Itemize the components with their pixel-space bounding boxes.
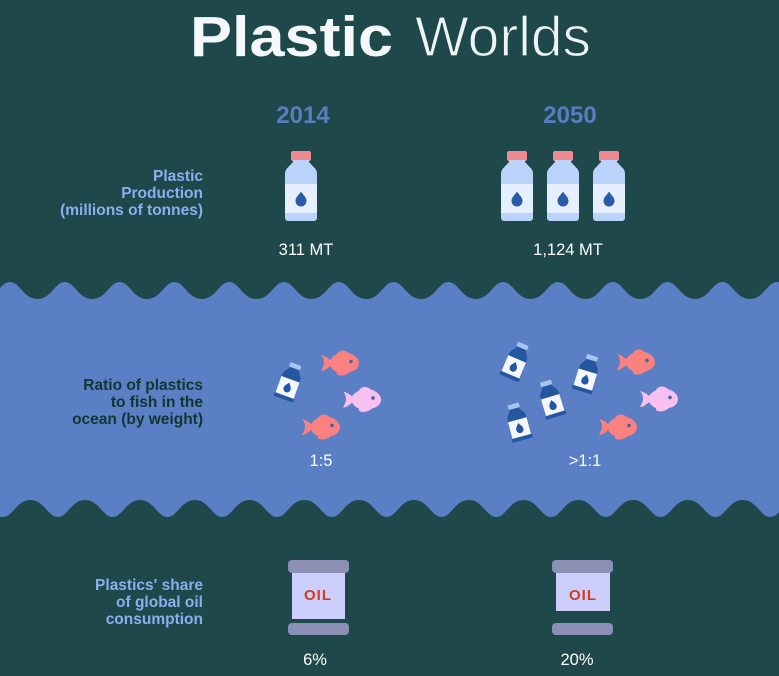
icon: oil barrel 2014: OIL [304,587,332,604]
row label: share of oil consumption: of global oil [116,594,203,611]
icon: small bottle 2 [572,353,603,395]
icons: bottles 2050 [501,151,625,221]
icon: pink fish [343,387,381,412]
icon: salmon fish top [617,350,655,374]
icon: salmon fish bottom [599,414,637,440]
value: 20%: 20% [560,651,594,669]
row label: share of oil consumption [95,577,203,628]
icon: oil barrel 2014 [288,560,349,635]
value: 1,124 MT: 1,124 MT [533,241,603,259]
value: 311 MT: 311 MT [279,241,333,259]
row label: share of oil consumption: consumption [106,611,203,628]
icon: bottle 2014 [285,151,317,221]
year heading 2050: 2050 [543,102,597,129]
row label: plastic production: (millions of tonnes) [60,202,203,219]
value: >1:1: >1:1 [569,452,601,470]
value: 1:5: 1:5 [310,452,332,470]
icon: oil barrel 2050 [552,560,613,635]
title: Plastic [190,5,393,69]
row label: ratio of plastics to fish: Ratio of plastics [83,377,203,394]
icon: oil barrel 2050: OIL [569,587,597,604]
icon: small bottle 4 [503,401,533,443]
icon: small bottle 1 [499,340,533,382]
icon: salmon fish bottom [302,414,340,440]
ocean band with wavy edges [0,282,779,517]
icon: pink fish [640,386,678,412]
row label: ratio of plastics to fish [72,377,203,428]
row label: ratio of plastics to fish: ocean (by weight) [72,411,203,428]
row label: ratio of plastics to fish: to fish in the [111,394,203,411]
icon group: 2050 plastic and fish [499,340,678,443]
row label: plastic production [60,168,203,219]
icon group: 2014 plastic and fish [273,350,381,440]
value: 6%: 6% [303,651,327,669]
row label: plastic production: Production [121,185,203,202]
icon: small bottle 3 [535,378,566,420]
icon: salmon fish top [321,350,359,376]
icon: small bottle [273,360,306,403]
title: Worlds: Worlds [415,5,591,69]
row label: share of oil consumption: Plastics' share [95,577,203,594]
row label: plastic production: Plastic [153,168,203,185]
year heading 2014: 2014 [276,102,330,129]
